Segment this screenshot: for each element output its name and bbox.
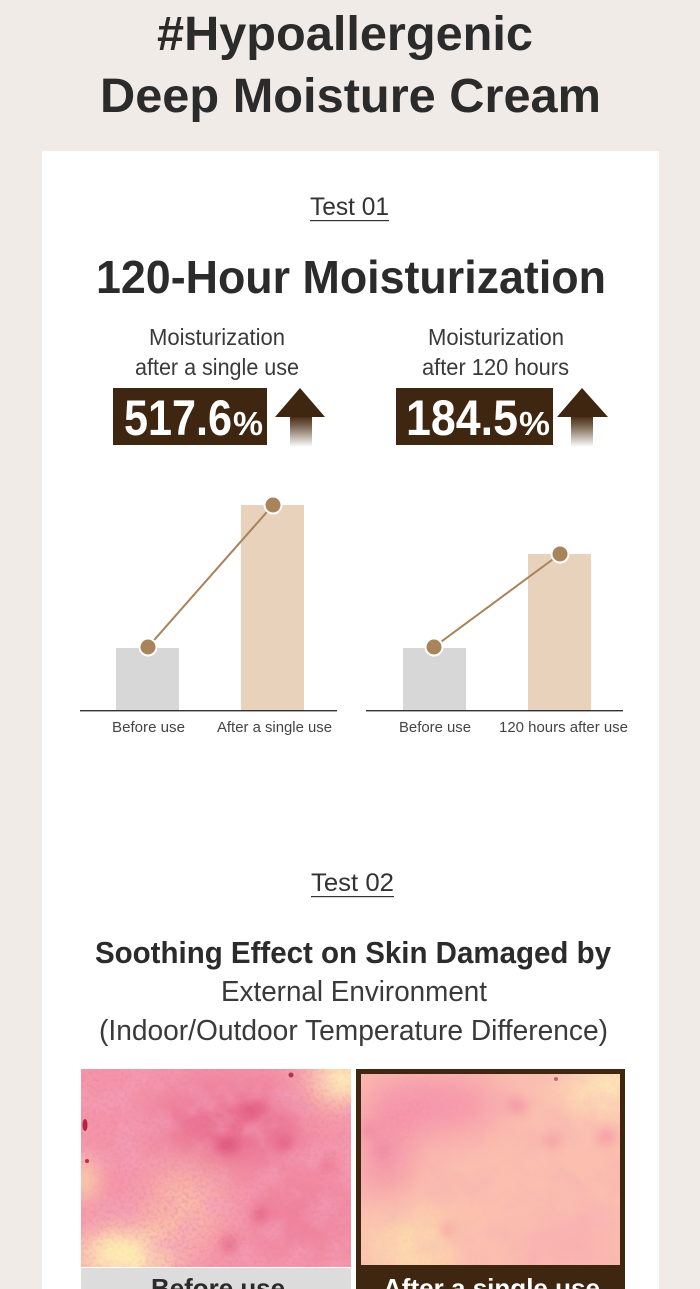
- text: external environment: [99, 976, 608, 1047]
- callout: 184.5%: %: [519, 405, 550, 442]
- photo: skin before use: [81, 1069, 351, 1267]
- bar chart: 120 hours after use: [366, 546, 628, 736]
- photo: skin after a single use: [361, 1074, 620, 1265]
- text: moisturization after 120 hours: [422, 324, 569, 380]
- frame: after a single use: [356, 1069, 625, 1289]
- title: Deep Moisture Cream: [100, 70, 601, 123]
- panel: white card: [42, 151, 659, 1289]
- text: external environment: External Environment: [221, 976, 487, 1008]
- heading: test 02 label: Test 02: [311, 869, 394, 897]
- bar chart: after a single use: Before use: [112, 719, 185, 736]
- heading: soothing effect: Soothing Effect on Skin Damaged by: [95, 935, 612, 970]
- text: external environment: (Indoor/Outdoor Temperature Difference): [99, 1015, 608, 1047]
- bar chart: after a single use: [80, 496, 337, 736]
- bar chart: 120 hours after use: Before use: [399, 719, 471, 736]
- panel: test 01: [80, 193, 628, 736]
- callout: 184.5%: 184.5: [406, 390, 518, 446]
- icon: up arrow left: [275, 388, 325, 447]
- text: moisturization after a single use: after a single use: [135, 354, 299, 380]
- text: moisturization after 120 hours: after 120 hours: [422, 354, 569, 380]
- panel: test 02: [74, 869, 647, 1289]
- callout: 517.6%: %: [233, 405, 263, 442]
- heading: 120-hour moisturization: 120-Hour Moisturization: [96, 251, 606, 303]
- icon: up arrow right: [557, 388, 608, 447]
- text: moisturization after a single use: [135, 324, 299, 380]
- callout: 517.6%: 517.6: [124, 390, 232, 446]
- text: moisturization after a single use: Moisturization: [149, 324, 285, 350]
- title: [100, 8, 601, 123]
- heading: test 01 label: Test 01: [310, 193, 389, 221]
- title: #Hypoallergenic: [157, 8, 533, 61]
- bar chart: 120 hours after use: 120 hours after use: [499, 719, 628, 736]
- label: before use: [81, 1268, 351, 1289]
- bar chart: after a single use: After a single use: [217, 719, 332, 736]
- text: moisturization after 120 hours: Moisturization: [428, 324, 564, 350]
